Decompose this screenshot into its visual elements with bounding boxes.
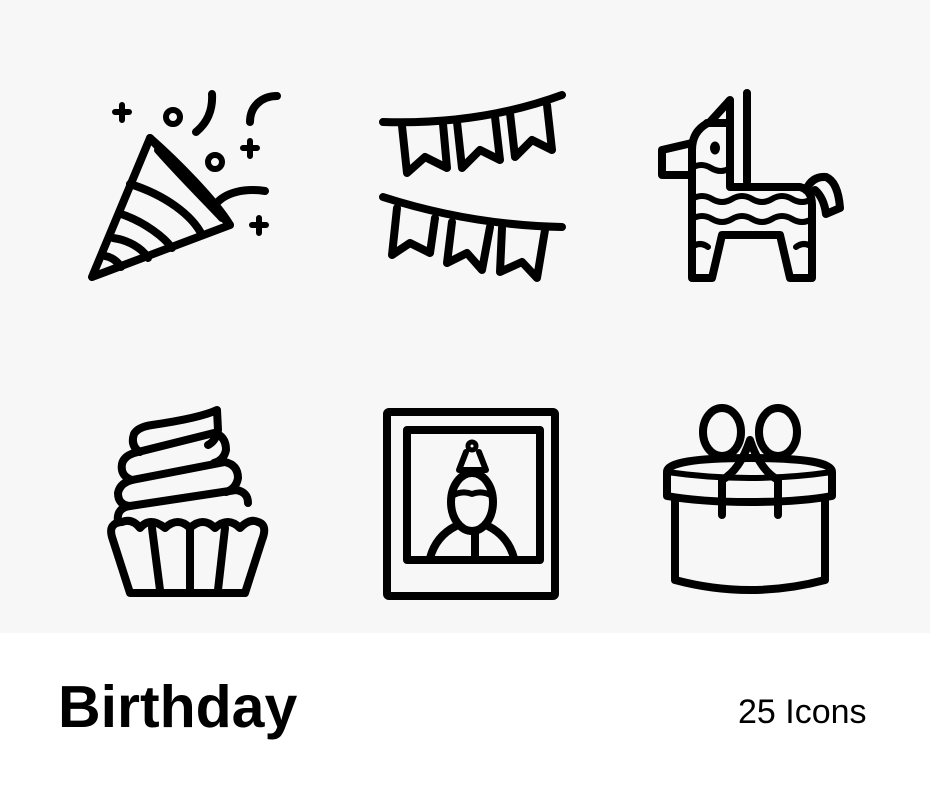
icon: gift box [667,408,832,590]
subtitle: icon count: 25 Icons [738,693,867,731]
icon: polaroid photo [387,412,555,596]
icon: bunting [383,95,562,278]
title: Birthday [58,674,297,740]
icon: party popper [92,94,277,277]
icon: cupcake [111,410,264,593]
icon: pinata [662,93,840,278]
